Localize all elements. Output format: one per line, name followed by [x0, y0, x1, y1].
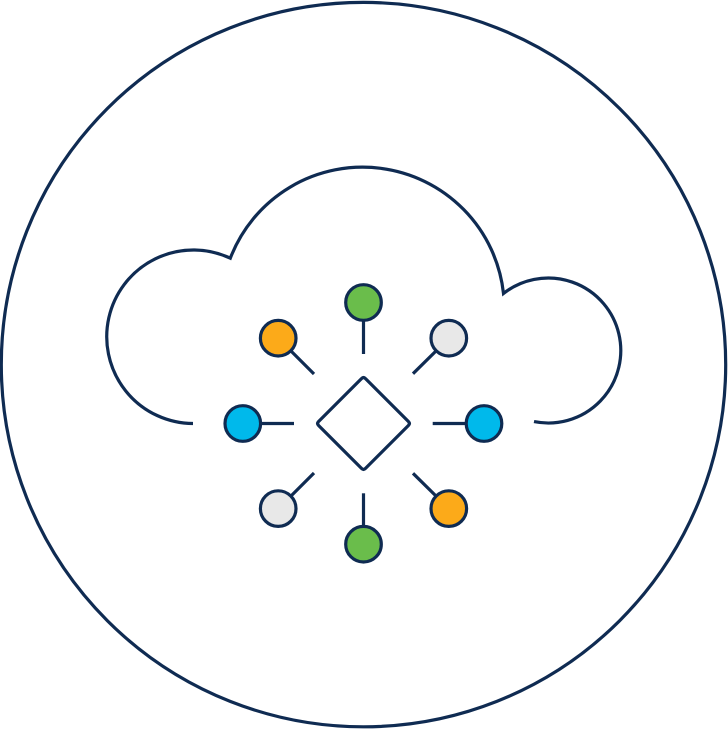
node: left blue	[225, 406, 294, 441]
node: right blue	[433, 406, 502, 441]
node: top-right gray	[413, 320, 467, 374]
cloud outline	[107, 167, 621, 424]
center diamond	[318, 378, 409, 469]
node: top-left orange	[260, 320, 314, 374]
node: top green	[346, 285, 381, 354]
node: bottom-left gray	[260, 473, 314, 526]
node: bottom-right orange	[413, 473, 467, 526]
node: bottom green	[346, 493, 381, 562]
